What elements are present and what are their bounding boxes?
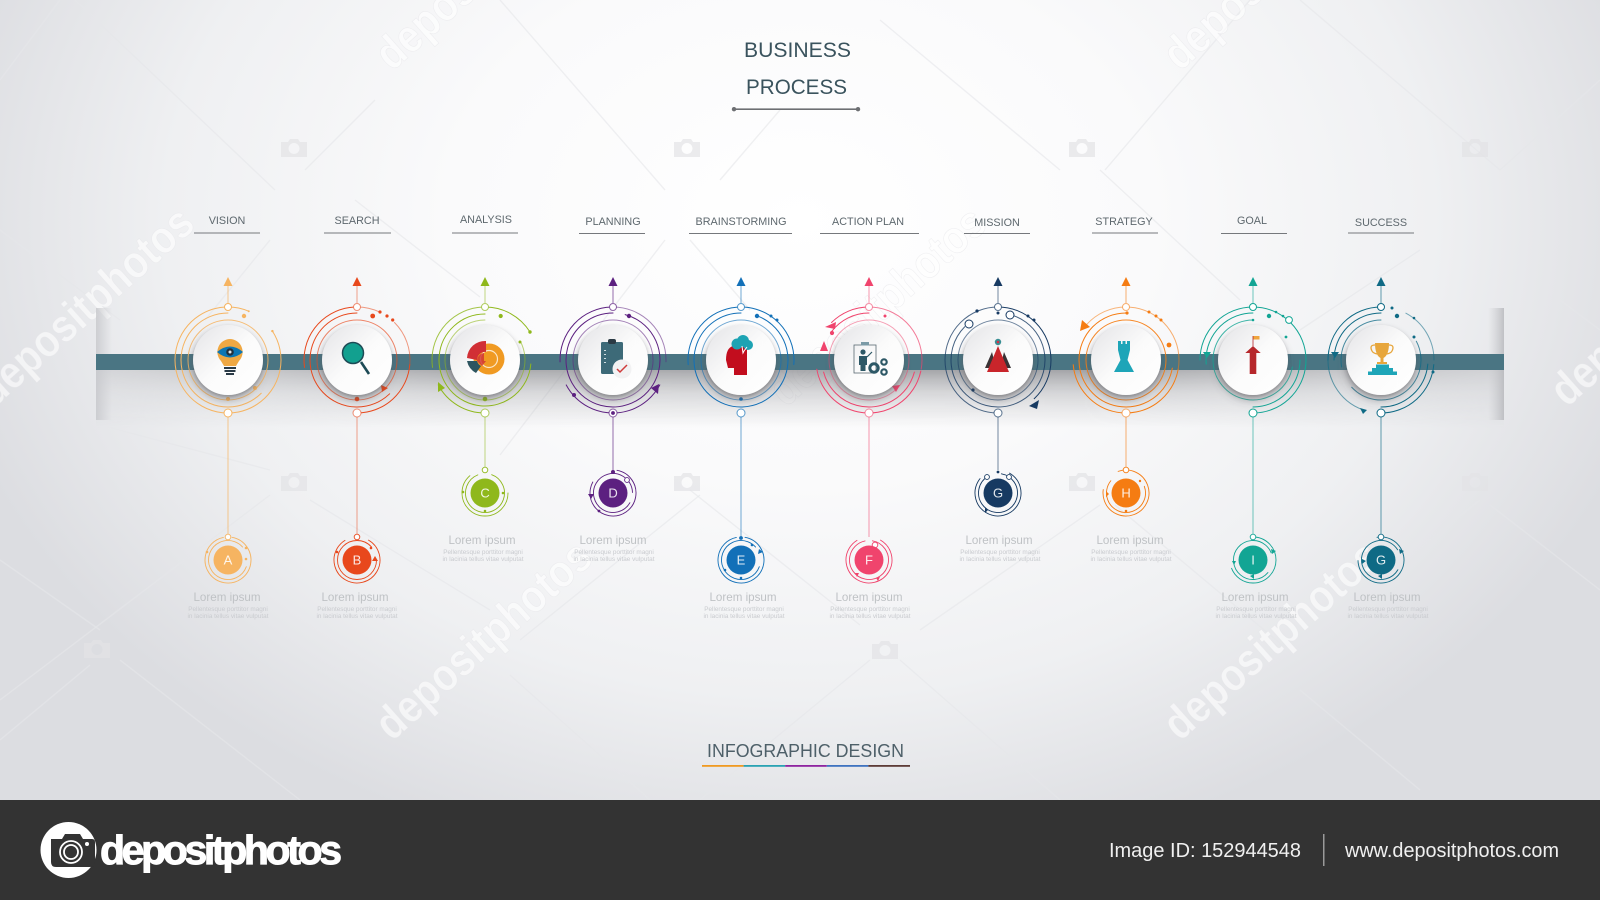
- rings D: [586, 466, 640, 520]
- disk 5: [706, 325, 776, 395]
- icon: light bulb with eye: [217, 339, 243, 375]
- lorem text blocks: Lorem ipsum: [321, 591, 389, 604]
- lorem text blocks: [188, 534, 1429, 620]
- lorem text blocks: in lacinia tellus vitae vulputat: [830, 613, 911, 620]
- step labels: ANALYSIS: [460, 214, 512, 226]
- step 2: search: [282, 277, 432, 537]
- node G2: [1378, 534, 1384, 540]
- node E: [739, 536, 743, 540]
- dots 3: [438, 314, 532, 401]
- marker G (mission): [967, 462, 1029, 524]
- lorem text blocks: in lacinia tellus vitae vulputat: [960, 556, 1041, 563]
- letter G2: G: [1376, 552, 1386, 568]
- connector lines 8: [1125, 286, 1127, 470]
- step labels: GOAL: [1237, 215, 1267, 227]
- dots D: [588, 494, 600, 512]
- rings 3: [425, 300, 545, 420]
- marker B: [326, 529, 388, 591]
- caption colour underline: [702, 765, 910, 767]
- rings H: [1097, 464, 1155, 522]
- lorem text blocks: Lorem ipsum: [965, 534, 1033, 547]
- arrow 1: [224, 277, 232, 286]
- watermark: stock-photo text: depositphotos: [758, 196, 996, 415]
- lorem text blocks: Pellentesque porttitor magni: [188, 606, 268, 613]
- nodes 1: [224, 304, 232, 417]
- dots C: [462, 491, 504, 512]
- lorem text blocks: in lacinia tellus vitae vulputat: [704, 613, 785, 620]
- icon: trophy on steps: [1368, 343, 1397, 375]
- icon: magnifier: [342, 342, 369, 374]
- dots F: [855, 573, 880, 581]
- title: [744, 39, 851, 99]
- nodes 4: [609, 304, 617, 417]
- rings 5: [681, 300, 801, 420]
- dots E: [724, 544, 763, 579]
- connector lines 3: [484, 286, 486, 470]
- step 10: success: [1309, 277, 1453, 537]
- lorem text blocks: Pellentesque porttitor magni: [830, 606, 910, 613]
- open circles 7: [965, 311, 1014, 328]
- rings B: [326, 529, 388, 591]
- rings 1: [155, 287, 301, 433]
- connector lines 7: [997, 286, 999, 470]
- nodes 6: [865, 304, 873, 417]
- disk B: [342, 546, 372, 574]
- rings C: [460, 468, 510, 518]
- rings E: [714, 533, 768, 587]
- letter F: F: [865, 552, 873, 568]
- lorem text blocks: Lorem ipsum: [579, 534, 647, 547]
- letter E: E: [737, 552, 746, 568]
- arrow 8: [1122, 277, 1130, 286]
- lorem text blocks: in lacinia tellus vitae vulputat: [316, 613, 398, 620]
- rings A: [201, 533, 255, 587]
- icon: upward arrow with flag: [1245, 336, 1261, 374]
- lorem text blocks: in lacinia tellus vitae vulputat: [442, 556, 524, 563]
- letter A: A: [224, 552, 233, 568]
- disk G2: [1366, 546, 1396, 574]
- dots 10: [1331, 306, 1434, 414]
- lorem text blocks: Lorem ipsum: [709, 591, 777, 604]
- letter G: G: [993, 486, 1003, 500]
- rings I: [1226, 533, 1280, 587]
- arrow 7: [994, 277, 1002, 286]
- dots 6: [820, 314, 900, 392]
- image id: Image ID: 152944548: [1109, 840, 1301, 862]
- icon: clipboard with check: [601, 339, 632, 378]
- rings G2: [1354, 533, 1408, 587]
- timeline bar: [96, 354, 1504, 370]
- lorem text blocks: Pellentesque porttitor magni: [1348, 606, 1428, 613]
- arrow 4: [608, 277, 618, 286]
- icon: head with cloud: [726, 335, 753, 375]
- step labels: VISION: [209, 215, 245, 227]
- lorem text blocks: in lacinia tellus vitae vulputat: [574, 556, 655, 563]
- node A: [225, 534, 231, 540]
- nodes 10: [1377, 304, 1385, 417]
- node I: [1250, 534, 1256, 540]
- nodes 9: [1249, 304, 1257, 417]
- arrow 2: [352, 277, 362, 286]
- node H: [1123, 467, 1129, 473]
- disk C: [470, 478, 500, 508]
- dots 1: [226, 310, 274, 401]
- site url: www.depositphotos.com: [1344, 840, 1559, 862]
- lorem text blocks: Pellentesque porttitor magni: [1091, 549, 1171, 556]
- node D: [611, 470, 615, 474]
- icon: camera: [51, 834, 95, 867]
- marker H: [1097, 464, 1155, 522]
- lorem text blocks: Pellentesque porttitor magni: [1216, 606, 1296, 613]
- disk 10: [1346, 325, 1416, 395]
- disk 1: [193, 325, 263, 395]
- step labels: ACTION PLAN: [832, 216, 904, 228]
- rings 4: [541, 288, 685, 432]
- marker F: [838, 529, 900, 591]
- disk 4: [578, 325, 648, 395]
- node B: [354, 534, 360, 540]
- disk H: [1112, 478, 1140, 508]
- dots 9: [1203, 311, 1287, 358]
- arrow 3: [480, 277, 490, 286]
- lorem text blocks: Lorem ipsum: [1353, 591, 1421, 604]
- footer separator: [1323, 834, 1324, 866]
- lorem text blocks: Lorem ipsum: [193, 591, 261, 604]
- logo wordmark: depositphotos: [100, 827, 342, 873]
- letter C: C: [480, 486, 490, 500]
- rings 6: [794, 285, 944, 435]
- step labels: MISSION: [974, 217, 1020, 229]
- lorem text blocks: Pellentesque porttitor magni: [704, 606, 784, 613]
- watermark: stock-photo text: depositphotos: [1152, 530, 1390, 749]
- connector lines 9: [1252, 286, 1254, 537]
- disk 2: [322, 325, 392, 395]
- title underline: [732, 107, 860, 111]
- watermark: stock-photo text: depositphotos: [364, 530, 602, 749]
- disk 3: [450, 325, 520, 395]
- watermark: camera icons: [84, 139, 1488, 659]
- footer band: [0, 800, 1600, 900]
- nodes 5: [737, 304, 745, 417]
- dots B: [336, 547, 378, 561]
- marker A: [201, 533, 255, 587]
- bottom caption: INFOGRAPHIC DESIGN: [707, 741, 904, 761]
- dots I: [1232, 549, 1276, 579]
- letter D: D: [608, 486, 618, 500]
- lorem text blocks: in lacinia tellus vitae vulputat: [1090, 556, 1172, 563]
- lorem text blocks: Pellentesque porttitor magni: [574, 549, 654, 556]
- icon: chess rook: [1114, 341, 1134, 372]
- nodes 7: [994, 304, 1002, 417]
- lorem text blocks: Pellentesque porttitor magni: [443, 549, 523, 556]
- connector lines 4: [612, 286, 614, 470]
- step 3: analysis: [425, 277, 545, 470]
- dots G: [985, 471, 999, 513]
- marker G (success): [1354, 533, 1408, 587]
- disk D: [598, 478, 628, 508]
- arrow 5: [736, 277, 746, 286]
- lorem text blocks: in lacinia tellus vitae vulputat: [188, 613, 269, 620]
- disk A: [214, 546, 242, 574]
- node C: [482, 467, 488, 473]
- marker E: [714, 533, 768, 587]
- nodes 2: [353, 304, 361, 417]
- arrow 10: [1376, 277, 1386, 286]
- rings 8: [1051, 285, 1201, 435]
- arrow 6: [864, 277, 874, 286]
- marker D: [586, 466, 640, 520]
- icon: mountains with target: [985, 339, 1011, 372]
- lorem text blocks: Pellentesque porttitor magni: [960, 549, 1040, 556]
- dots 4: [572, 314, 659, 397]
- dots 8: [1080, 310, 1171, 347]
- dots H: [1106, 480, 1141, 512]
- title: PROCESS: [746, 76, 847, 99]
- disk G: [984, 478, 1012, 508]
- disk E: [726, 546, 756, 574]
- step labels: STRATEGY: [1095, 216, 1153, 228]
- lorem text blocks: in lacinia tellus vitae vulputat: [1216, 613, 1297, 620]
- lorem text blocks: Lorem ipsum: [1096, 534, 1164, 547]
- open circle D: [625, 478, 629, 482]
- step labels: SUCCESS: [1355, 217, 1407, 229]
- rings 9: [1196, 303, 1310, 417]
- lorem text blocks: Lorem ipsum: [835, 591, 903, 604]
- step 7: mission: [940, 277, 1056, 470]
- dots A: [206, 547, 247, 560]
- step labels: SEARCH: [334, 215, 380, 227]
- step 9: goal: [1196, 277, 1310, 537]
- connector lines 1: [227, 286, 229, 537]
- disk 7: [963, 325, 1033, 395]
- step 4: planning: [541, 277, 685, 470]
- title: BUSINESS: [744, 39, 851, 62]
- letter H: H: [1121, 486, 1131, 500]
- disk I: [1238, 546, 1268, 574]
- step 1: vision: [155, 277, 301, 537]
- disk F: [854, 546, 884, 574]
- connector lines 5: [740, 286, 742, 537]
- dots 2: [355, 310, 394, 401]
- letter I: I: [1251, 552, 1255, 568]
- dots 5: [739, 314, 778, 401]
- step labels: BRAINSTORMING: [696, 216, 786, 228]
- step 8: strategy: [1051, 277, 1201, 470]
- nodes G: [985, 475, 1011, 479]
- rings 10: [1309, 288, 1453, 432]
- rings F: [838, 529, 900, 591]
- lorem text blocks: Lorem ipsum: [1221, 591, 1289, 604]
- rings 7: [940, 302, 1056, 418]
- rings G: [967, 462, 1029, 524]
- lorem text blocks: Pellentesque porttitor magni: [317, 606, 397, 613]
- letter B: B: [353, 552, 361, 568]
- node F: [872, 542, 878, 548]
- timeline shadow: [96, 308, 1504, 428]
- connector lines 2: [356, 286, 358, 537]
- step labels: [194, 214, 1414, 234]
- step 6: action plan: [794, 277, 944, 537]
- connector lines 6: [868, 286, 870, 537]
- icon: plan with gears: [854, 342, 887, 375]
- lorem text blocks: in lacinia tellus vitae vulputat: [1348, 613, 1429, 620]
- disk 8: [1091, 325, 1161, 395]
- rings 2: [282, 285, 432, 435]
- disk 6: [834, 325, 904, 395]
- step labels: PLANNING: [585, 216, 641, 228]
- arrow 9: [1248, 277, 1258, 286]
- dots 7: [971, 309, 1039, 409]
- footer logo: [40, 822, 342, 878]
- dots G2: [1362, 549, 1404, 579]
- nodes 8: [1122, 304, 1130, 417]
- lorem text blocks: Lorem ipsum: [448, 534, 516, 547]
- disk 9: [1218, 325, 1288, 395]
- open circle 9: [1286, 317, 1292, 323]
- marker C: [460, 467, 510, 518]
- marker I: [1226, 533, 1280, 587]
- nodes 3: [481, 304, 489, 417]
- icon: donut chart: [467, 341, 504, 374]
- step 5: brainstorming: [681, 277, 801, 537]
- connector lines 10: [1380, 286, 1382, 537]
